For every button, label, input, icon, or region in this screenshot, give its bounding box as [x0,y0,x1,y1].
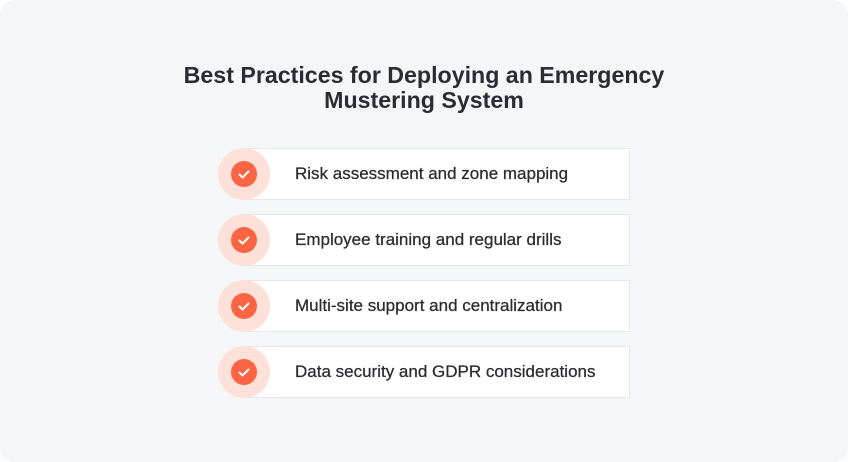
text 2: Employee training and regular drills [295,230,561,249]
icon: check 3 [218,280,270,332]
text 1: Risk assessment and zone mapping [295,164,568,183]
item 1 [218,148,630,200]
title [184,62,664,113]
card 1 [242,148,630,200]
title: Best Practices for Deploying an Emergency [184,62,664,88]
text 3: Multi-site support and centralization [295,296,562,315]
icon: check 1 [218,148,270,200]
card 2 [242,214,630,266]
item 2 [218,214,630,266]
item 3 [218,280,630,332]
title: Mustering System [324,87,524,113]
item 4 [218,346,630,398]
card 4 [242,346,630,398]
card 3 [242,280,630,332]
text 4: Data security and GDPR considerations [295,362,595,381]
icon: check 2 [218,214,270,266]
icon: check 4 [218,346,270,398]
